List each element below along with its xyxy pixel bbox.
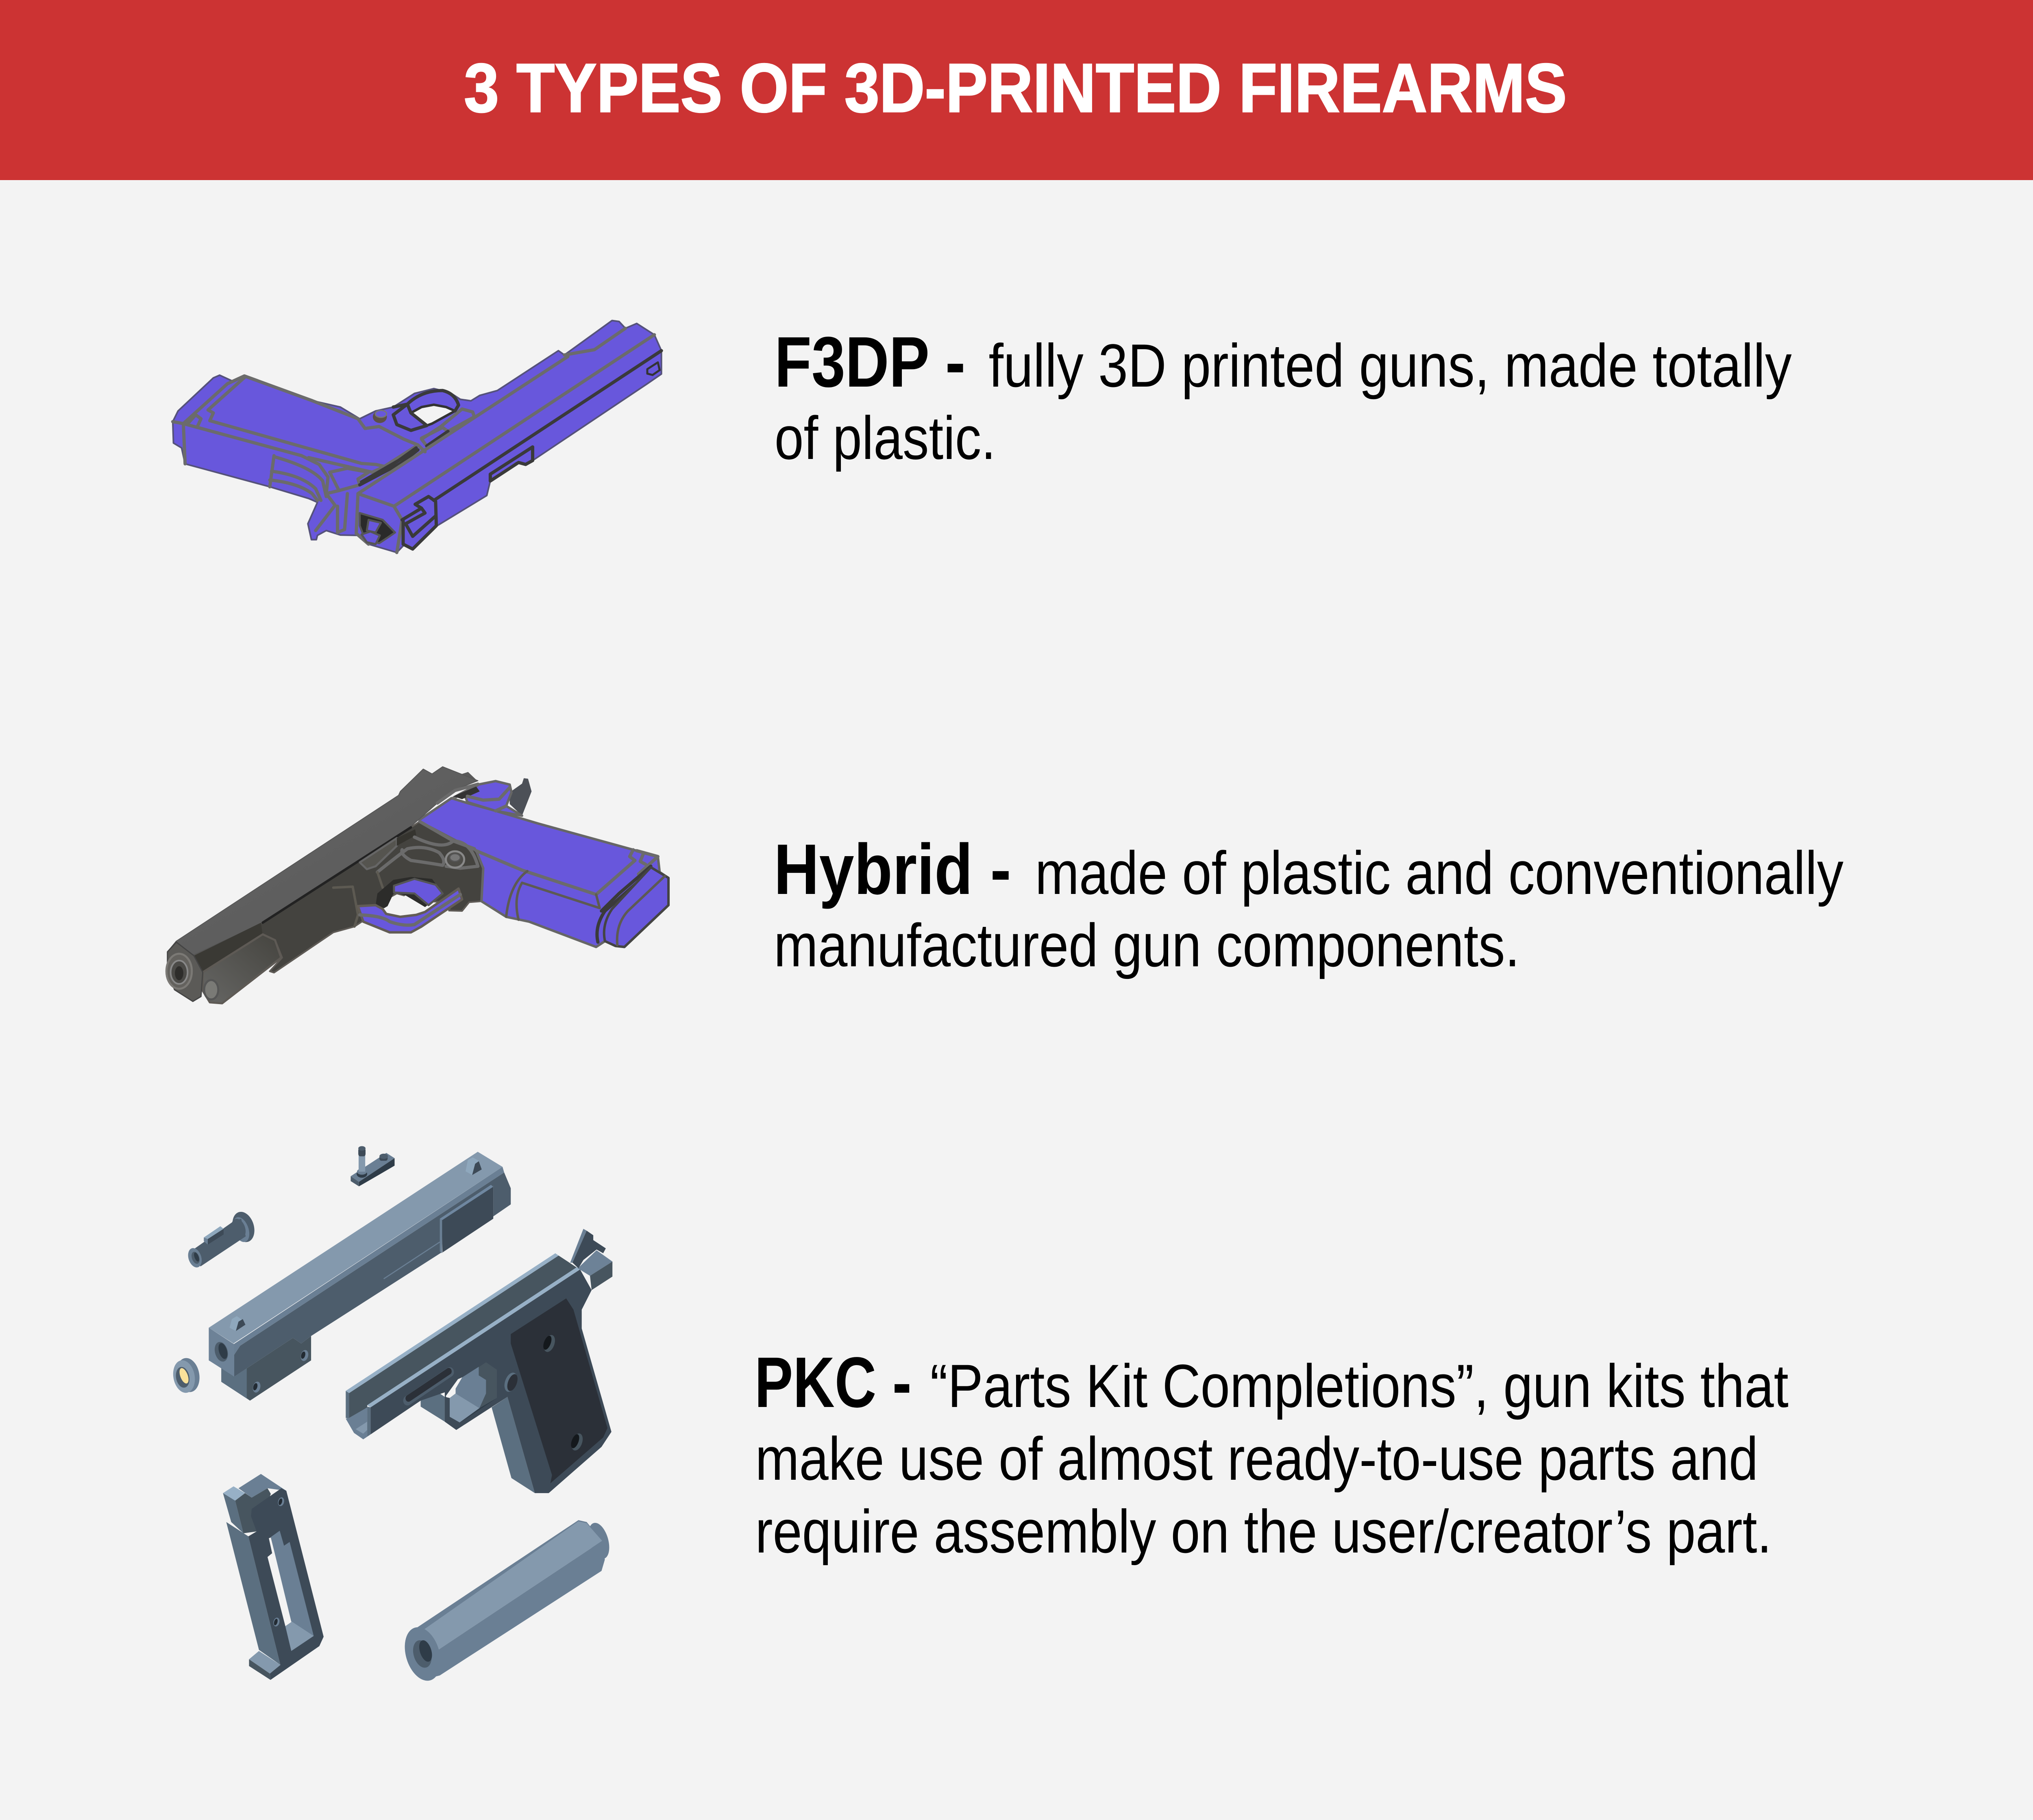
- part: bolt: [185, 1208, 259, 1270]
- text block: PKC: PKC -: [755, 1343, 912, 1422]
- icon: fully 3D printed purple pistol: [173, 320, 662, 552]
- icon: exploded parts kit: [170, 1146, 613, 1687]
- part: washer ring: [170, 1355, 203, 1396]
- part: slide: [209, 1152, 511, 1400]
- text block: PKC: make use of almost ready-to-use parts and: [755, 1424, 1758, 1493]
- text block: PKC: [755, 1343, 1789, 1566]
- text block: F3DP: F3DP -: [775, 322, 965, 402]
- header banner: [0, 0, 2033, 180]
- text block: F3DP: of plastic.: [775, 404, 996, 472]
- text block: Hybrid: [774, 830, 1844, 979]
- part: magazine: [223, 1474, 324, 1680]
- text block: Hybrid: manufactured gun components.: [774, 911, 1520, 979]
- part: pin bar: [351, 1146, 394, 1186]
- part: frame: [346, 1229, 612, 1493]
- part: barrel tube: [398, 1520, 613, 1687]
- text block: Hybrid: Hybrid -: [774, 830, 1011, 909]
- text block: F3DP: [775, 322, 1792, 472]
- text block: PKC: require assembly on the user/creator’s part.: [755, 1497, 1772, 1566]
- text block: F3DP: fully 3D printed guns, made totally: [989, 331, 1792, 400]
- title: 3 TYPES OF 3D-PRINTED FIREARMS: [464, 49, 1567, 126]
- text block: Hybrid: made of plastic and conventionally: [1035, 839, 1844, 907]
- text block: PKC: “Parts Kit Completions”, gun kits that: [930, 1352, 1789, 1420]
- icon: hybrid pistol with metal slide and purple printed frame: [166, 767, 668, 1003]
